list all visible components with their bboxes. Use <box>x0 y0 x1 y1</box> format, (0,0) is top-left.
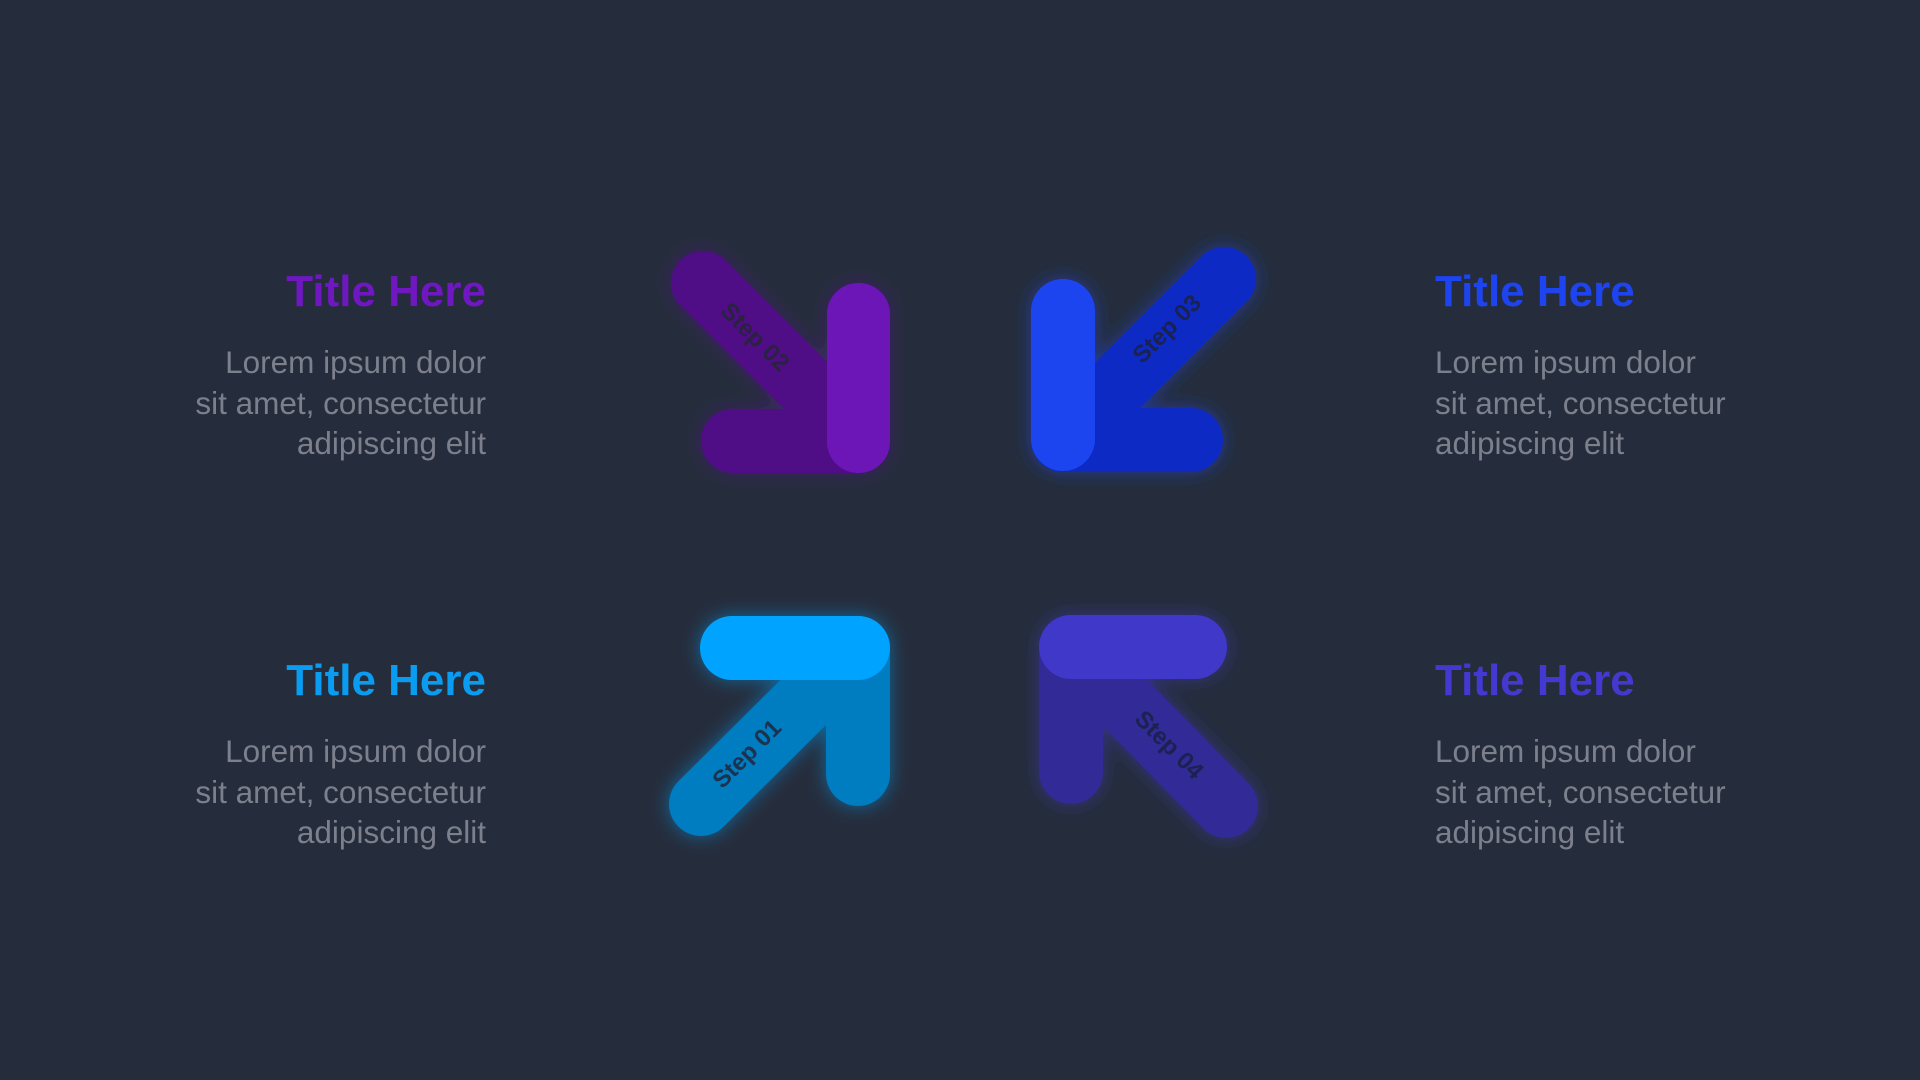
body: bottom-left <box>195 733 486 850</box>
body: top-left: sit amet, consectetur <box>195 384 486 420</box>
arrow: step 03: Step 03 <box>1127 289 1207 369</box>
title: top-right: Title Here <box>1435 267 1635 316</box>
text block: top-left <box>195 267 486 461</box>
body: top-right: Lorem ipsum dolor <box>1435 344 1696 380</box>
arrow: step 04: Step 04 <box>1129 705 1209 785</box>
body: top-left <box>195 344 486 461</box>
text block: bottom-right <box>1435 656 1726 850</box>
arrow: step 02 <box>703 283 890 473</box>
body: top-left: Lorem ipsum dolor <box>225 344 486 380</box>
body: bottom-right: Lorem ipsum dolor <box>1435 733 1696 769</box>
title: bottom-left: Title Here <box>286 656 486 705</box>
body: bottom-left: adipiscing elit <box>297 814 486 850</box>
body: top-left: adipiscing elit <box>297 425 486 461</box>
arrow: step 04 <box>1039 615 1227 806</box>
text block: top-right <box>1435 267 1726 461</box>
body: bottom-left: sit amet, consectetur <box>195 774 486 810</box>
body: top-right: sit amet, consectetur <box>1435 384 1726 420</box>
body: bottom-left: Lorem ipsum dolor <box>225 733 486 769</box>
arrow: step 02: Step 02 <box>715 297 795 377</box>
body: bottom-right: sit amet, consectetur <box>1435 774 1726 810</box>
arrow: step 01 <box>700 616 890 804</box>
title: bottom-right: Title Here <box>1435 656 1635 705</box>
title: top-left: Title Here <box>286 267 486 316</box>
body: top-right <box>1435 344 1726 461</box>
body: bottom-right: adipiscing elit <box>1435 814 1624 850</box>
body: top-right: adipiscing elit <box>1435 425 1624 461</box>
body: bottom-right <box>1435 733 1726 850</box>
text block: bottom-left <box>195 656 486 850</box>
arrow: step 01: Step 01 <box>707 714 787 794</box>
arrow: step 03 <box>1031 279 1224 471</box>
